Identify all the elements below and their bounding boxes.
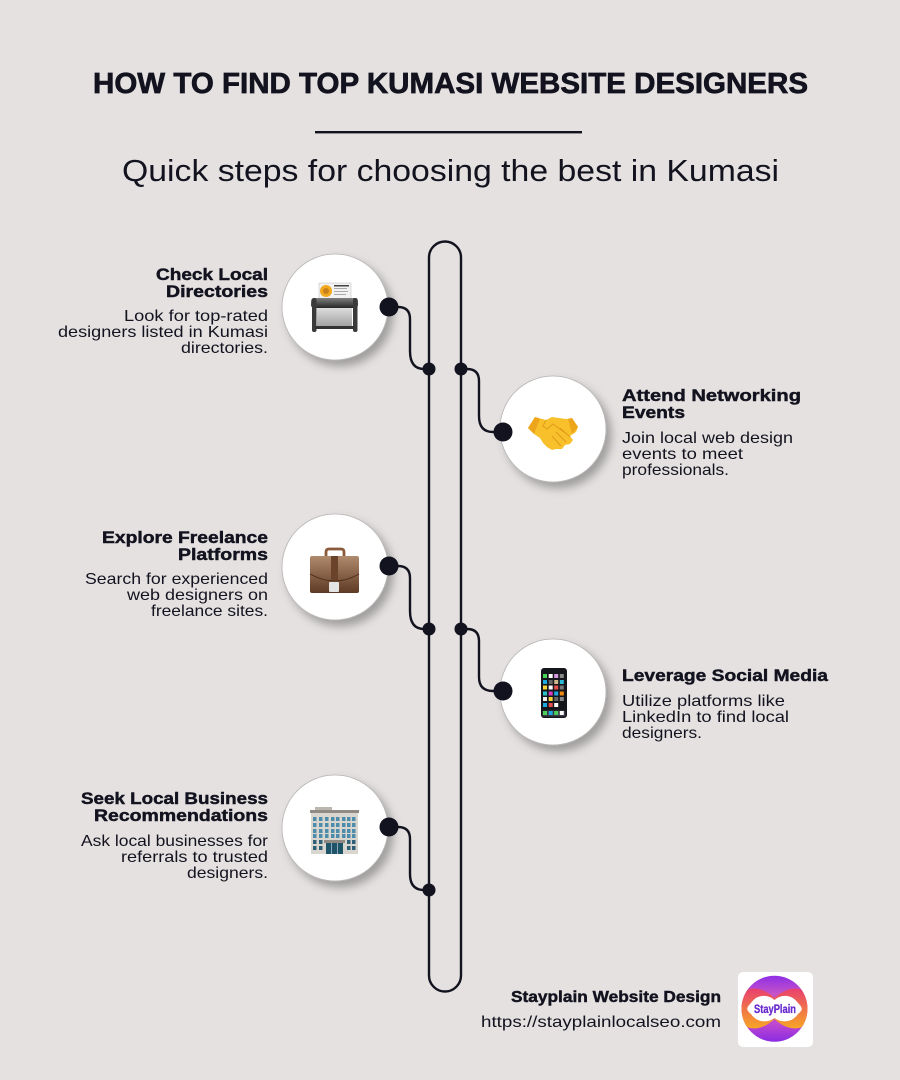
step 5 description: referrals to trusted — [121, 849, 268, 866]
step 4 connector — [454, 622, 503, 691]
subtitle: Quick steps for choosing the best in Kumasi — [122, 153, 779, 188]
step 2 description — [622, 430, 793, 479]
step 1 heading: Directories — [166, 282, 268, 301]
step 2 heading: Attend Networking — [622, 386, 801, 405]
step 2 description: events to meet — [622, 446, 744, 463]
step 4 node — [494, 682, 512, 700]
step 5 description: designers. — [187, 865, 268, 882]
step 5 description: Ask local businesses for — [81, 833, 269, 850]
step 1 heading: Check Local — [156, 265, 268, 284]
step 3 circle — [282, 514, 388, 620]
step 5 connector — [389, 827, 436, 896]
step 1 description: directories. — [181, 340, 268, 357]
step 4 description: Utilize platforms like — [622, 693, 785, 710]
step 4 circle — [500, 639, 606, 745]
step 4 description: LinkedIn to find local — [622, 709, 789, 726]
step 5 heading: Seek Local Business — [81, 789, 268, 808]
step 1 description: designers listed in Kumasi — [58, 324, 268, 341]
step 2 description: professionals. — [622, 462, 729, 479]
icon: handshake — [528, 417, 578, 450]
step 2 connector — [454, 362, 503, 432]
step 3 description: web designers on — [126, 587, 268, 604]
step 5 circle — [282, 775, 388, 881]
step 1 heading — [156, 265, 268, 301]
step 3: explore freelance platforms — [85, 514, 436, 636]
step 5 node — [380, 818, 398, 836]
step 3 heading: Platforms — [178, 545, 268, 564]
step 3 node — [380, 556, 398, 576]
timeline loop — [429, 242, 461, 992]
step 3 description: freelance sites. — [151, 603, 268, 620]
step 3 description — [85, 571, 268, 620]
logo: StayPlain — [754, 1004, 796, 1016]
step 2: attend networking events — [454, 362, 801, 482]
step 1: check local directories — [58, 254, 436, 376]
step 3 connector — [389, 566, 436, 636]
step 5: seek local business recommendations — [81, 775, 436, 896]
step 2 heading: Events — [622, 403, 685, 422]
title: HOW TO FIND TOP KUMASI WEBSITE DESIGNERS — [93, 68, 808, 100]
step 5 heading: Recommendations — [94, 806, 268, 825]
step 1 connector — [389, 307, 436, 376]
step 3 description: Search for experienced — [85, 571, 268, 588]
step 4 description: designers. — [622, 725, 702, 742]
step 1 description — [58, 308, 268, 357]
step 2 node — [494, 422, 512, 442]
step 5 description — [81, 833, 269, 882]
step 2 description: Join local web design — [622, 430, 793, 447]
step 4 description — [622, 693, 789, 742]
step 4: leverage social media — [454, 622, 829, 745]
logo — [738, 972, 813, 1047]
footer url: https://stayplainlocalseo.com — [481, 1014, 721, 1031]
icon: smartphone — [541, 668, 567, 718]
step 2 circle — [500, 376, 606, 482]
step 3 heading: Explore Freelance — [102, 528, 268, 547]
step 1 node — [380, 298, 398, 316]
icon: briefcase — [310, 549, 359, 593]
step 3 heading — [102, 528, 268, 564]
step 1 circle — [282, 254, 388, 360]
icon: office building — [310, 807, 359, 854]
step 2 heading — [622, 386, 801, 422]
step 4 heading: Leverage Social Media — [622, 666, 829, 685]
step 1 description: Look for top-rated — [124, 308, 268, 325]
icon: document scanner — [311, 283, 358, 332]
footer brand name: Stayplain Website Design — [511, 989, 721, 1006]
step 5 heading — [81, 789, 268, 825]
